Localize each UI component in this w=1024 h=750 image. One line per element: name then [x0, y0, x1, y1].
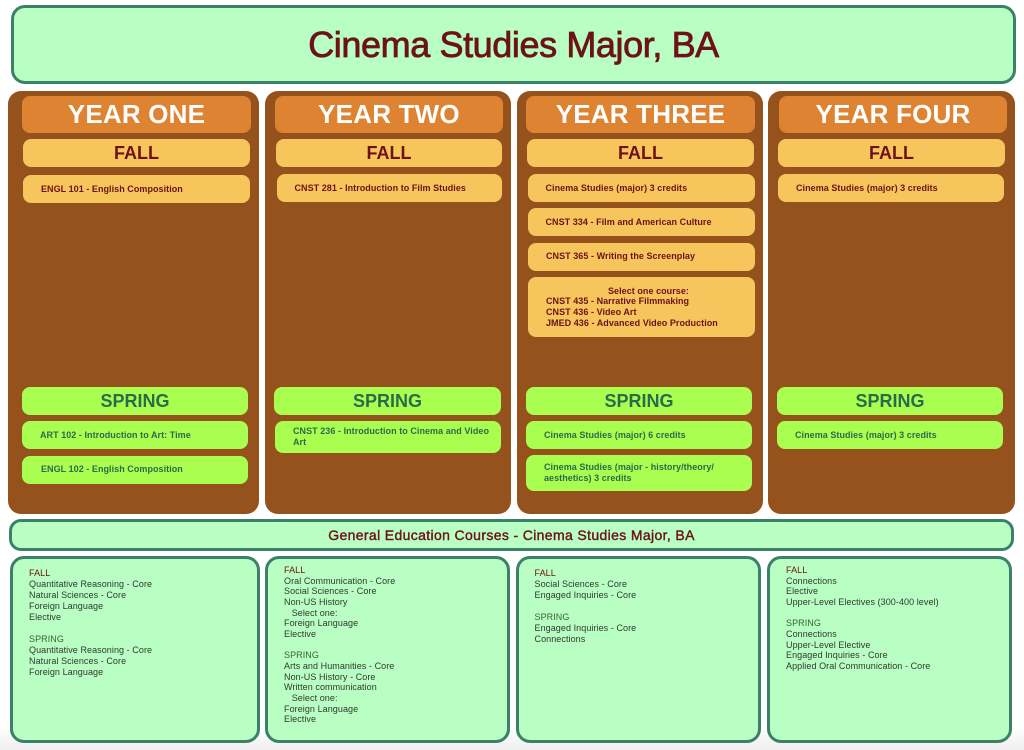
- course: CNST 334: CNST 334 - Film and American Culture: [546, 217, 712, 227]
- heading: year four: [779, 96, 1007, 133]
- text: year one general education list: FALL Quantitative Reasoning - Core Natural Sciences - Core Foreign Language Elective SPRING Quantitative Reasoning - Core Natural Sciences - Core Foreign Language: [29, 568, 152, 677]
- heading: general education bar: General Education Courses - Cinema Studies Major, BA: [328, 527, 695, 543]
- course: CNST 281: CNST 281 - Introduction to Film Studies: [294, 183, 466, 193]
- course: major 3 credits fall: [778, 174, 1004, 202]
- heading: year three: [526, 96, 755, 133]
- heading: year two spring: SPRING: [353, 390, 422, 410]
- course: major 6 credits: [526, 421, 752, 449]
- panel: general education year three: [516, 556, 760, 743]
- heading: year two fall: [276, 139, 502, 167]
- course: select one course: Select one course:: [608, 286, 689, 296]
- text: year four general education list: FALL Connections Elective Upper-Level Electives (300-400 level) SPRING Connections Upper-Level Elective Engaged Inquiries - Core Applied Oral Communication - Core: [786, 565, 939, 671]
- course: major 3 credits: Cinema Studies (major) 3 credits: [546, 183, 687, 193]
- course: select one course: [528, 277, 754, 337]
- heading: year three: YEAR THREE: [556, 99, 725, 129]
- course: ENGL 102: [22, 456, 248, 484]
- heading: year four: YEAR FOUR: [816, 99, 970, 129]
- panel: general education year two: [265, 556, 510, 743]
- panel: year one: [8, 91, 259, 514]
- course: CNST 365: CNST 365 - Writing the Screenplay: [546, 251, 695, 261]
- course: major history theory aesthetics: [526, 455, 752, 491]
- heading: year one fall: [23, 139, 250, 167]
- course: major 6 credits: Cinema Studies (major) 6 credits: [544, 430, 686, 440]
- heading: year two: YEAR TWO: [318, 99, 460, 129]
- heading: year two: [275, 96, 503, 133]
- course: major history theory aesthetics: Cinema Studies (major - history/theory/ aesthetics) 3 credits: [544, 462, 714, 483]
- course: CNST 365: [528, 242, 754, 270]
- course: CNST 334: [528, 208, 754, 236]
- title: [11, 5, 1016, 84]
- heading: year four fall: [778, 139, 1005, 167]
- panel: general education year four: [767, 556, 1012, 743]
- course: CNST 236: CNST 236 - Introduction to Cinema and Video Art: [293, 426, 489, 447]
- heading: year two fall: FALL: [366, 142, 412, 162]
- heading: year three spring: [526, 387, 752, 415]
- panel: general education year one: [10, 556, 260, 743]
- course: ENGL 101: ENGL 101 - English Composition: [41, 184, 183, 194]
- heading: year four spring: [777, 387, 1003, 415]
- course: major 3 credits: [528, 174, 754, 202]
- heading: year one: YEAR ONE: [68, 99, 205, 129]
- heading: year one: [22, 96, 251, 133]
- course: ART 102: [22, 421, 248, 449]
- panel: year three: [516, 91, 763, 514]
- course: select one course: CNST 435 - Narrative Filmmaking: [546, 296, 689, 306]
- heading: year one spring: SPRING: [100, 390, 170, 410]
- heading: year three fall: [527, 139, 754, 167]
- course: major 3 credits spring: [777, 421, 1003, 449]
- course: ENGL 101: [23, 175, 250, 203]
- heading: year three fall: FALL: [618, 142, 663, 162]
- course: select one course: CNST 436 - Video Art: [546, 307, 637, 317]
- course: CNST 236: [275, 421, 501, 453]
- course: ENGL 102: ENGL 102 - English Composition: [41, 464, 183, 474]
- course: CNST 281: [277, 174, 502, 202]
- text: year three general education list: FALL Social Sciences - Core Engaged Inquiries - Core SPRING Engaged Inquiries - Core Connections: [534, 568, 636, 644]
- heading: year four fall: FALL: [869, 142, 914, 162]
- heading: year one fall: FALL: [114, 142, 159, 162]
- course: major 3 credits spring: Cinema Studies (major) 3 credits: [795, 430, 937, 440]
- title: Cinema Studies Major, BA: [308, 24, 719, 64]
- course: select one course: JMED 436 - Advanced Video Production: [546, 318, 718, 328]
- heading: year three spring: SPRING: [604, 390, 674, 410]
- text: year two general education list: FALL Oral Communication - Core Social Sciences - Core Non-US History Select one: Foreign Language Elective SPRING Arts and Humanities - Core Non-US History - Core Written communication Select one: Foreign Language Elective: [284, 565, 395, 724]
- heading: general education bar: [9, 519, 1014, 551]
- heading: year one spring: [22, 387, 248, 415]
- course: ART 102: ART 102 - Introduction to Art: Time: [40, 430, 191, 440]
- panel: year two: [265, 91, 511, 514]
- panel: year four: [768, 91, 1015, 514]
- heading: year two spring: [274, 387, 501, 415]
- course: major 3 credits fall: Cinema Studies (major) 3 credits: [796, 183, 938, 193]
- heading: year four spring: SPRING: [855, 390, 924, 410]
